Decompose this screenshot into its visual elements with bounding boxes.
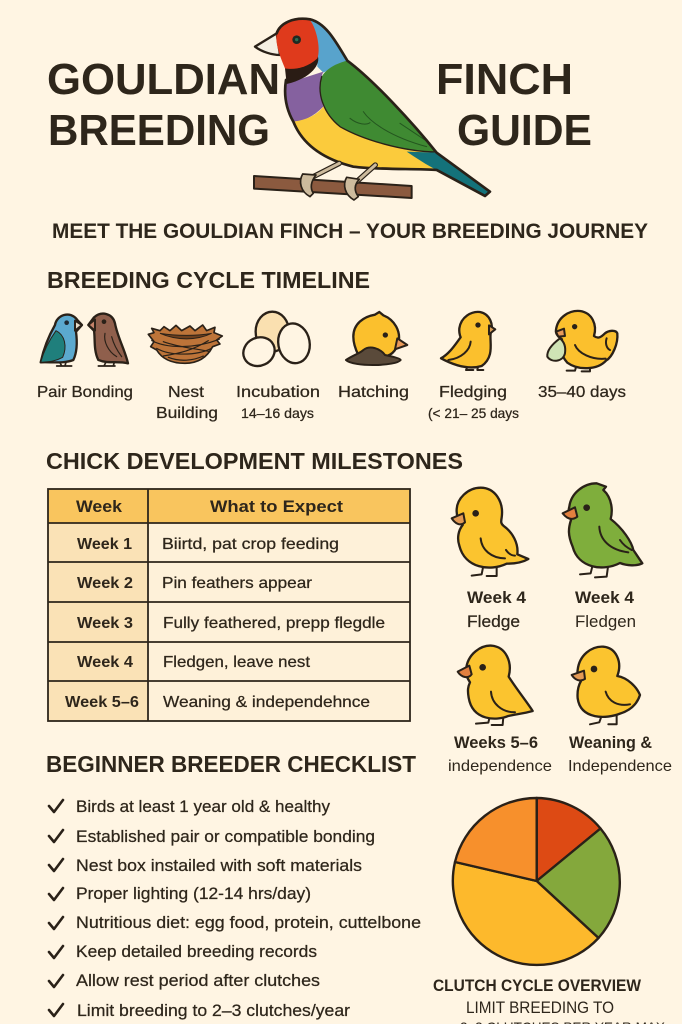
- timeline labels: Pair Bonding: [37, 384, 133, 401]
- weeks 5-6 labels: Weeks 5–6: [454, 733, 538, 752]
- checklist: Birds at least 1 year old & healthy: [76, 797, 330, 816]
- checklist: Established pair or compatible bonding: [76, 827, 375, 846]
- timeline labels: Hatching: [338, 384, 409, 401]
- icon: weaned chick with seed: [547, 311, 617, 371]
- title: GOULDIAN: [47, 55, 280, 104]
- checklist: Limit breeding to 2–3 clutches/year: [77, 1001, 350, 1020]
- title: GUIDE: [457, 106, 592, 155]
- table: weekly milestones: Week 4: [77, 654, 133, 671]
- checklist: Nutritious diet: egg food, protein, cuttelbone: [76, 913, 421, 932]
- weeks 5-6 labels: Weaning &: [569, 733, 652, 752]
- table: weekly milestones: Week 1: [77, 536, 132, 553]
- weeks 5-6 labels: independence: [448, 758, 552, 775]
- icon: green chick week 4: [563, 483, 642, 577]
- heading: beginner breeder checklist: BEGINNER BREEDER CHECKLIST: [46, 751, 416, 777]
- title: BREEDING: [48, 106, 270, 155]
- clutch cycle caption: CLUTCH CYCLE OVERVIEW: [433, 977, 641, 995]
- week 4 labels: Fledgen: [575, 612, 636, 631]
- pie chart: clutch cycle: [453, 798, 620, 965]
- icon: yellow chick weaning: [572, 647, 640, 724]
- heading: chick development milestones: CHICK DEVELOPMENT MILESTONES: [46, 448, 463, 474]
- checklist: [49, 797, 421, 1020]
- icon: eggs: [239, 312, 313, 371]
- timeline labels: (< 21– 25 days: [428, 405, 519, 421]
- week 4 labels: Week 4: [467, 588, 527, 607]
- table: weekly milestones: Weaning & independehnce: [163, 694, 370, 711]
- table: weekly milestones: Biirtd, pat crop feeding: [162, 536, 339, 553]
- table: weekly milestones: Week 5–6: [65, 694, 139, 711]
- icon: Gouldian finch on perch: [254, 19, 490, 200]
- weeks 5-6 labels: Independence: [568, 758, 672, 775]
- title: FINCH: [436, 55, 573, 104]
- table: weekly milestones: [48, 489, 410, 721]
- week 4 labels: Week 4: [575, 588, 635, 607]
- clutch cycle caption: LIMIT BREEDING TO: [466, 999, 614, 1017]
- checklist: Nest box instailed with soft materials: [76, 856, 362, 875]
- clutch cycle caption: [433, 977, 666, 1024]
- icon: hatching chick: [346, 312, 407, 365]
- icon: nest: [148, 325, 222, 363]
- timeline labels: Building: [156, 405, 218, 422]
- timeline labels: Incubation: [236, 384, 320, 401]
- checklist: Keep detailed breeding records: [76, 942, 317, 961]
- icon: fledging chick: [441, 312, 495, 370]
- table: weekly milestones: Week 2: [77, 575, 133, 592]
- weeks 5-6 labels: [448, 733, 672, 775]
- timeline labels: 35–40 days: [538, 384, 626, 401]
- week 4 labels: Fledge: [467, 612, 520, 631]
- title: [47, 55, 592, 155]
- checklist: Proper lighting (12-14 hrs/day): [76, 884, 311, 903]
- heading: breeding cycle timeline: BREEDING CYCLE TIMELINE: [47, 267, 370, 293]
- timeline labels: 14–16 days: [241, 405, 314, 421]
- table: weekly milestones: Fledgen, leave nest: [163, 654, 311, 671]
- timeline labels: [37, 384, 626, 422]
- table: weekly milestones: Week 3: [77, 615, 133, 632]
- subtitle: MEET THE GOULDIAN FINCH – YOUR BREEDING JOURNEY: [52, 220, 648, 243]
- icon: yellow chick week 4: [452, 488, 528, 576]
- icon: pair of birds: [41, 314, 128, 366]
- icon: yellow chick weeks 5-6: [458, 646, 533, 725]
- table: weekly milestones: Pin feathers appear: [162, 575, 313, 592]
- timeline labels: Nest: [168, 384, 205, 401]
- table: weekly milestones: What to Expect: [210, 497, 343, 516]
- checklist: Allow rest period after clutches: [76, 971, 320, 990]
- table: weekly milestones: Week: [76, 497, 123, 516]
- week 4 labels: [467, 588, 636, 631]
- timeline labels: Fledging: [439, 384, 507, 401]
- table: weekly milestones: Fully feathered, prepp flegdle: [163, 615, 385, 632]
